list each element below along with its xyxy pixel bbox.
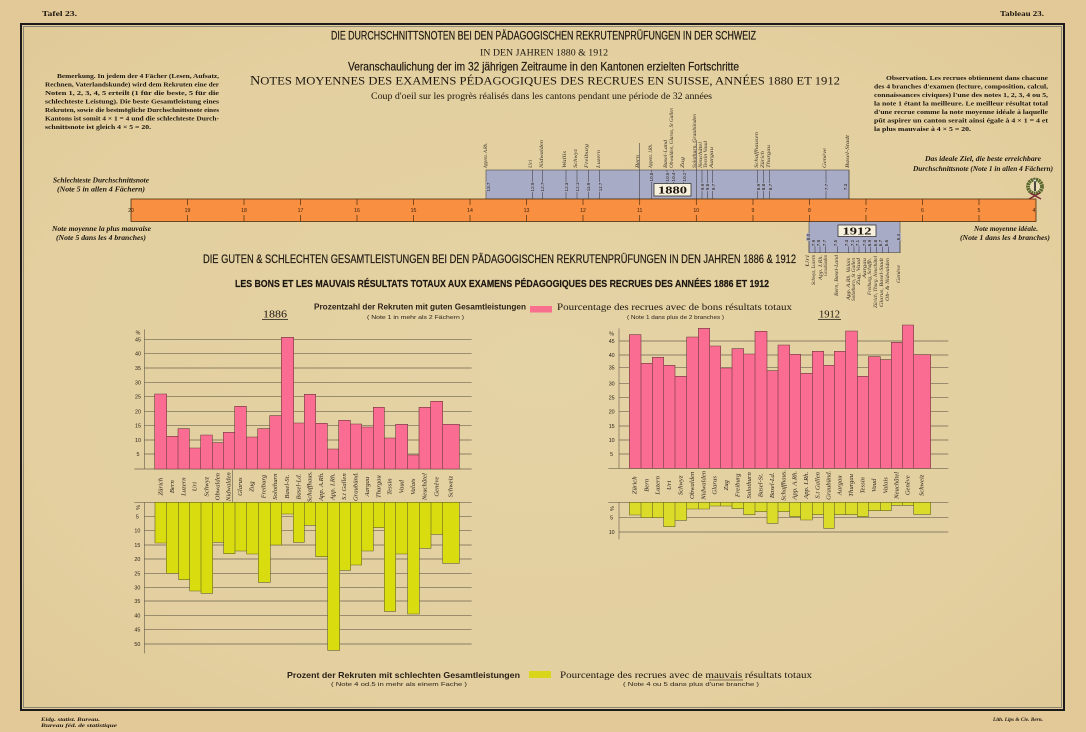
canton labels 1912: App. A.Rh. [792, 471, 799, 501]
canton labels 1912: Freiburg [734, 473, 741, 498]
note: Observation [874, 75, 1049, 133]
canton labels 1886: Genève [433, 477, 440, 497]
canton labels 1912: Schaffhaus. [780, 470, 787, 501]
value labels 1912: 6.4 [896, 233, 901, 240]
caption: worst average french: Note moyenne la plus mauvaise [51, 225, 151, 233]
axis labels 1912 lower: 5 [610, 515, 613, 521]
canton labels 1912: Basel-Ld. [769, 472, 776, 498]
canton names 1880: Schaffhausen [753, 132, 760, 168]
axis labels 1886 lower [134, 505, 142, 648]
canton labels 1886: Solothurn [272, 473, 279, 500]
canton labels 1912: Obwalden [689, 471, 696, 499]
canton names 1880: Luzern [596, 150, 602, 169]
year label 1912: 1912 [842, 226, 872, 238]
title block: NOTES MOYENNES DES EXAMENS PÉDAGOGIQUES DES RECRUES EN SUISSE, ANNÉES 1880 ET 1912 [250, 72, 840, 88]
legend: good results [314, 302, 793, 321]
canton names 1880: Basel-Stadt [845, 134, 851, 168]
axis labels 1912 upper: 20 [609, 410, 615, 416]
canton names 1880: Bern [635, 155, 641, 168]
caption: ideal goal: Das ideale Ziel, die beste erreichbare [924, 155, 1041, 163]
canton names 1880: Zürich [760, 151, 766, 168]
chart: 1886 bad results [134, 502, 472, 653]
canton labels 1912: S.t Gallen [815, 471, 822, 499]
scale numbers: 5 [978, 208, 981, 214]
caption: worst average left [53, 176, 149, 194]
canton labels 1886: Aargau [364, 476, 371, 498]
canton names 1880: Genève [822, 147, 828, 168]
note: Observation: d'une recrue comme la note moyenne idéale à laquelle [874, 109, 1048, 116]
scale numbers: 8 [808, 208, 811, 214]
canton names 1912: Zug, Vaud [856, 258, 862, 285]
axis labels 1886 lower: 50 [134, 642, 140, 648]
orange scale bar [128, 199, 1036, 222]
scale ticks [188, 199, 979, 222]
scale numbers: 9 [752, 208, 755, 214]
scale numbers: 12 [580, 208, 586, 214]
value labels 1912: 7.1 [855, 239, 860, 246]
canton labels 1912: Zug [723, 479, 730, 491]
scale numbers: 11 [637, 208, 643, 214]
axis labels 1886 lower: % [136, 505, 142, 510]
note: Observation: connaissances civiques) l'une des notes 1, 2, 3, 4 ou 5, [874, 92, 1048, 99]
value labels 1880: 8.9 [756, 183, 761, 190]
canton labels 1912: Aargau [837, 475, 844, 496]
canton labels 1886: Valais [410, 478, 417, 495]
value labels 1912: 7.8 [816, 239, 821, 246]
scale numbers: 4 [1033, 208, 1036, 214]
value labels 1912: 6.9 [867, 239, 872, 246]
note: Bemerkung: Rekruten, sowie die bestmögliche Durchschnittsnote eines [45, 107, 220, 114]
canton labels 1912: Zürich [632, 476, 639, 494]
icon: laurel wreath [1028, 179, 1042, 199]
title block: Coup d'oeil sur les progrès réalisés dans les cantons pendant une période de 32 années [371, 92, 712, 102]
canton labels 1912: Valais [882, 477, 889, 493]
canton labels 1886: Vaud [398, 479, 405, 493]
title block: IN DEN JAHREN 1880 & 1912 [480, 48, 608, 58]
axis labels 1912 upper: 5 [610, 452, 613, 458]
canton labels 1886: Neuchâtel [421, 473, 428, 501]
canton labels 1912: Luzern [655, 475, 662, 496]
canton names 1880: Appenz. A.Rh. [483, 143, 489, 169]
legend: bad results [287, 670, 813, 688]
canton names 1880 [483, 108, 851, 169]
note: Bemerkung: Kantons ist somit 4 × 1 = 4 und die schlechteste Durch- [45, 116, 219, 122]
canton names 1880: Appenz. I.Rh. [648, 144, 654, 169]
canton names 1880: Solothurn, Graubünden [692, 114, 698, 168]
value labels 1912: 6.6 [884, 239, 889, 246]
canton labels 1912: Nidwalden [701, 470, 708, 501]
axis labels 1886 lower: 20 [134, 557, 140, 563]
heading: second section french: LES BONS ET LES MAUVAIS RÉSULTATS TOTAUX AUX EXAMENS PÉDAGOGIQUES DES RECRUES DES ANNÉES 1886 ET 1912 [235, 277, 769, 290]
canton names 1880: Uri [528, 159, 534, 168]
canton labels 1886: Zürich [157, 477, 164, 496]
canton labels 1886: Basel-Ld. [296, 473, 303, 500]
canton names 1912 [805, 254, 902, 308]
canton labels 1886 [157, 471, 455, 502]
axis labels 1886 lower: 35 [134, 599, 140, 605]
canton labels 1912 [632, 470, 926, 501]
canton labels 1886: App. A.Rh. [318, 472, 325, 502]
axis labels 1912 upper: 45 [609, 339, 615, 345]
value labels 1880: 12.1 [575, 182, 580, 191]
value lines 1880 [532, 140, 849, 199]
panel: 1912 band [806, 221, 901, 253]
axis labels 1886 lower: 5 [136, 515, 139, 521]
canton names 1880: Nidwalden [539, 140, 545, 169]
value labels 1880: 7.3 [843, 183, 848, 190]
value lines 1912 [809, 240, 900, 253]
canton labels 1886: Thurgau [375, 475, 382, 498]
caption: worst average left: (Note 5 in allen 4 Fächern) [57, 186, 145, 194]
canton names 1912: Bern, Basel-Land [834, 255, 840, 296]
canton labels 1912: Tessin [859, 476, 866, 494]
canton labels 1886: Graubünd. [353, 472, 360, 501]
value labels 1880: 10.5 [665, 172, 670, 181]
canton names 1880: Zug [680, 157, 686, 168]
legend: bad results: ( Note 4 ou 5 dans plus d'une branche ) [623, 682, 759, 688]
scale numbers [128, 208, 1036, 214]
note: Observation: des 4 branches d'examen (lecture, composition, calcul, [874, 84, 1048, 90]
value labels 1912: 7.9 [811, 239, 816, 246]
axis labels 1886 upper: 45 [135, 338, 141, 344]
axis labels 1912 lower: % [610, 506, 616, 511]
value labels 1912: 7.7 [822, 239, 827, 246]
value labels 1880: 8.8 [761, 183, 766, 190]
caption: worst average left: Schlechteste Durchschnittsnote [53, 176, 149, 184]
value labels 1880: 10.2 [682, 172, 687, 181]
canton names 1880: Basel-Land [663, 140, 669, 168]
axis labels 1886 lower: 30 [134, 585, 140, 591]
canton labels 1886: Schwyz [203, 476, 210, 496]
canton labels 1912: Neuchâtel [893, 472, 900, 500]
canton labels 1886: Schweiz [448, 476, 455, 497]
canton labels 1886: Zug [249, 481, 256, 492]
axis labels 1886 lower: 25 [134, 571, 140, 577]
imprint right: Lith. Lips & Cie. Bern. [992, 717, 1043, 723]
scale numbers: 13 [524, 208, 529, 214]
canton labels 1912: Bern [643, 478, 650, 492]
axis labels 1912 upper: 15 [609, 424, 615, 430]
legend: good results: Pourcentage des recrues avec de bons résultats totaux [557, 302, 793, 312]
canton labels 1912: Basel-St. [758, 473, 765, 497]
canton labels 1912: Thurgau [848, 473, 855, 497]
legend: bad results: ( Note 4 od.5 in mehr als einem Fache ) [331, 682, 467, 688]
imprint left: Bureau féd. de statistique [40, 723, 118, 729]
axis labels 1886 upper: 30 [135, 380, 141, 386]
value labels 1880: 13.7 [486, 182, 491, 191]
imprint left: Eidg. statist. Bureau. [40, 717, 100, 723]
axis labels 1912 upper: 10 [609, 438, 615, 444]
value labels 1880: 12.9 [530, 182, 535, 191]
canton labels 1912: Schweiz [919, 474, 926, 496]
note: Bemerkung: Bemerkung. In jedem der 4 Fächer (Lesen, Aufsatz, [57, 73, 219, 80]
year heading 1886: 1886 [263, 308, 288, 320]
note: Bemerkung: schnittsnote ist gleich 4 × 5 = 20. [45, 124, 151, 131]
caption: ideal french: Note moyenne idéale. [973, 225, 1038, 233]
caption: ideal goal: Durchschnittsnote (Note 1 in allen 4 Fächern) [912, 165, 1053, 173]
axis labels 1886 lower: 15 [134, 543, 140, 549]
canton names 1912: Freiburg, Schaffh. [866, 258, 873, 296]
canton names 1912: Genève [896, 264, 902, 283]
canton labels 1886: Basel-St. [284, 474, 291, 499]
scale numbers: 6 [921, 208, 924, 214]
plate number right: Tableau 23. [1000, 9, 1044, 18]
canton labels 1886: Uri [192, 482, 199, 491]
note: Observation: la note 1 étant la meilleure. Le meilleur résultat total [874, 100, 1048, 108]
canton labels 1912: Schwyz [677, 475, 684, 495]
canton names 1912: Uri [805, 254, 811, 267]
scale numbers: 7 [865, 208, 868, 214]
canton names 1880: Aargau [709, 147, 715, 169]
scale numbers: 15 [411, 208, 416, 214]
canton names 1912: Aargau [862, 258, 868, 279]
note: Observation: la plus mauvaise à 4 × 5 = 20. [874, 126, 971, 133]
scale numbers: 16 [354, 208, 360, 214]
axis labels 1912 upper [609, 331, 615, 458]
legend: bad results: Prozent der Rekruten mit schlechten Gesamtleistungen [287, 670, 520, 680]
scale numbers: 14 [467, 208, 473, 214]
value labels 1880: 10.8 [649, 172, 654, 181]
panel: 1880 band [486, 140, 849, 199]
caption: worst average french: (Note 5 dans les 4 branches) [56, 234, 146, 242]
scale numbers: 17 [298, 208, 303, 214]
canton labels 1912: Glarus [712, 476, 719, 495]
value labels 1880: 9.9 [700, 183, 705, 190]
axis labels 1912 lower [609, 506, 616, 536]
note: Observation: Observation. Les recrues obtiennent dans chacune [886, 75, 1048, 82]
canton names 1880: Schwyz [573, 148, 579, 168]
scale numbers: 19 [185, 208, 190, 214]
value labels 1912: 7.5 [833, 239, 838, 246]
canton names 1912: Graubünden [823, 255, 829, 276]
canton labels 1886: Luzern [180, 477, 187, 497]
canton labels 1886: Freiburg [260, 474, 267, 499]
axis labels 1886 upper: 35 [135, 366, 141, 372]
scale numbers: 20 [128, 208, 134, 214]
value labels 1912: 7.2 [850, 239, 855, 246]
axis labels 1886 upper: 5 [137, 452, 140, 458]
axis labels 1886 upper [135, 331, 141, 458]
imprint left [40, 717, 118, 729]
canton labels 1912: Genève [905, 475, 912, 495]
note: Bemerkung [45, 73, 220, 131]
axis labels 1886 lower: 40 [134, 614, 140, 620]
canton names 1880: Obwalden, Glarus, St Gallen [669, 108, 675, 168]
note: Observation: pût aspirer un canton serait ainsi égale à 4 × 1 = 4 et [874, 118, 1049, 124]
legend: bad results: Pourcentage des recrues avec de mauvais résultats totaux [560, 670, 813, 680]
title block: DIE DURCHSCHNITTSNOTEN BEI DEN PÄDAGOGISCHEN REKRUTENPRÜFUNGEN IN DER SCHWEIZ [331, 30, 756, 42]
chart: 1912 bad results [608, 502, 948, 539]
canton names 1912: Ob- & Nidwalden [885, 258, 891, 301]
canton names 1912: App. A.Rh. Valais [846, 258, 852, 301]
chart: 1912 good results [608, 325, 948, 539]
value labels 1912 [806, 233, 901, 246]
axis labels 1912 upper: 30 [609, 381, 615, 387]
chart: 1886 good results [134, 329, 472, 502]
value labels 1880: 11.7 [598, 182, 603, 191]
canton labels 1886: Tessin [387, 478, 394, 495]
caption: ideal french [960, 225, 1050, 242]
title block [250, 30, 840, 102]
axis labels 1886 lower: 45 [134, 628, 140, 634]
axis labels 1912 upper: 40 [609, 353, 615, 359]
scale numbers: 18 [241, 208, 247, 214]
note: Bemerkung: schlechteste Leistung). Die beste Gesamtleistung eines [45, 98, 220, 106]
year label 1880: 1880 [658, 186, 687, 196]
value labels 1880: 10.4 [671, 172, 676, 181]
canton labels 1886: Schaffhaus. [307, 471, 314, 502]
canton names 1912: Schwyz, Luzern [811, 255, 817, 285]
canton labels 1912: Solothurn [746, 472, 753, 498]
year label 1880 [654, 184, 691, 196]
canton labels 1886: App. I.Rh. [330, 473, 337, 501]
value labels 1912: 8.0 [806, 233, 811, 240]
canton names 1912: Glarus, Basel-Stadt [879, 257, 885, 307]
note: Bemerkung: Noten 1, 2, 3, 4, 5 erteilt (1 für die beste, 5 für die [45, 90, 219, 97]
legend: good results: Prozentzahl der Rekruten mit guten Gesamtleistungen [314, 302, 526, 312]
axis labels 1886 upper: 25 [135, 395, 141, 401]
canton labels 1912: Uri [666, 481, 673, 490]
axis labels 1886 upper: 40 [135, 352, 141, 358]
axis labels 1886 upper: 10 [135, 438, 141, 444]
axis labels 1912 upper: % [609, 331, 614, 337]
value labels 1912: 6.8 [873, 239, 878, 246]
value labels 1912: 7.3 [844, 239, 849, 246]
canton names 1880: Freiburg [584, 144, 590, 169]
axis labels 1912 upper: 35 [609, 366, 615, 372]
canton names 1912: App. I.Rh. [818, 255, 824, 281]
plate number left: Tafel 23. [42, 9, 77, 18]
canton labels 1912: Graubünd. [826, 470, 833, 500]
heading: second section german: DIE GUTEN & SCHLECHTEN GESAMTLEISTUNGEN BEI DEN PÄDAGOGISCHEN REKRUTENPRÜFUNGEN IN DEN JAHREN 1886 & 1912 [203, 254, 796, 266]
value labels 1880: 12.3 [564, 182, 569, 191]
value labels 1880 [486, 172, 848, 191]
canton labels 1912: App. I.Rh. [803, 472, 810, 500]
axis labels 1886 upper: 20 [135, 409, 141, 415]
legend: good results: ( Note 1 dans plus de 2 branches ) [627, 315, 724, 321]
title block: Veranschaulichung der im 32 jährigen Zeitraume in den Kantonen erzielten Fortschritte [348, 60, 739, 74]
legend: good results: ( Note 1 in mehr als 2 Fächern ) [367, 315, 464, 321]
axis labels 1886 upper: 15 [135, 423, 141, 429]
axis labels 1912 upper: 25 [609, 395, 615, 401]
value labels 1880: 8.7 [768, 183, 773, 190]
canton names 1912: Zürich, Thurg. Neuchâtel [873, 256, 879, 308]
axis labels 1886 lower: 10 [134, 529, 140, 535]
canton names 1880: Wallis [562, 151, 568, 168]
axis labels 1886 upper: % [136, 331, 141, 337]
canton names 1880: Tessin Vaud [703, 141, 709, 168]
caption: ideal french: (Note 1 dans les 4 branches) [960, 234, 1050, 242]
canton names 1880: Thurgau [766, 145, 772, 168]
axis labels 1912 lower: 10 [609, 530, 615, 536]
note: Bemerkung: Rechnen, Vaterlandskunde) wird dem Rekruten eine der [45, 82, 219, 88]
value labels 1880: 7.7 [824, 183, 829, 190]
value labels 1880: 12.7 [540, 182, 545, 191]
caption: worst average french [51, 225, 151, 242]
caption: ideal goal [912, 155, 1053, 173]
value labels 1880: 9.7 [711, 183, 716, 190]
canton names 1912: Solothurn, St Gallen [851, 258, 857, 301]
value labels 1912: 7.0 [862, 239, 867, 246]
canton labels 1886: S.t Gallen [341, 473, 348, 500]
year heading 1912: 1912 [819, 308, 840, 320]
canton names 1880: Neuchâtel [698, 141, 704, 169]
canton labels 1886: Bern [169, 480, 176, 493]
canton labels 1886: Obwalden [214, 472, 221, 500]
canton labels 1886: Nidwalden [226, 472, 233, 502]
value labels 1880: 9.8 [705, 183, 710, 190]
scale numbers: 10 [693, 208, 699, 214]
canton labels 1886: Glarus [237, 477, 244, 496]
value labels 1912: 6.7 [878, 239, 883, 246]
value labels 1880: 11.9 [586, 182, 591, 191]
canton labels 1912: Vaud [871, 478, 878, 492]
